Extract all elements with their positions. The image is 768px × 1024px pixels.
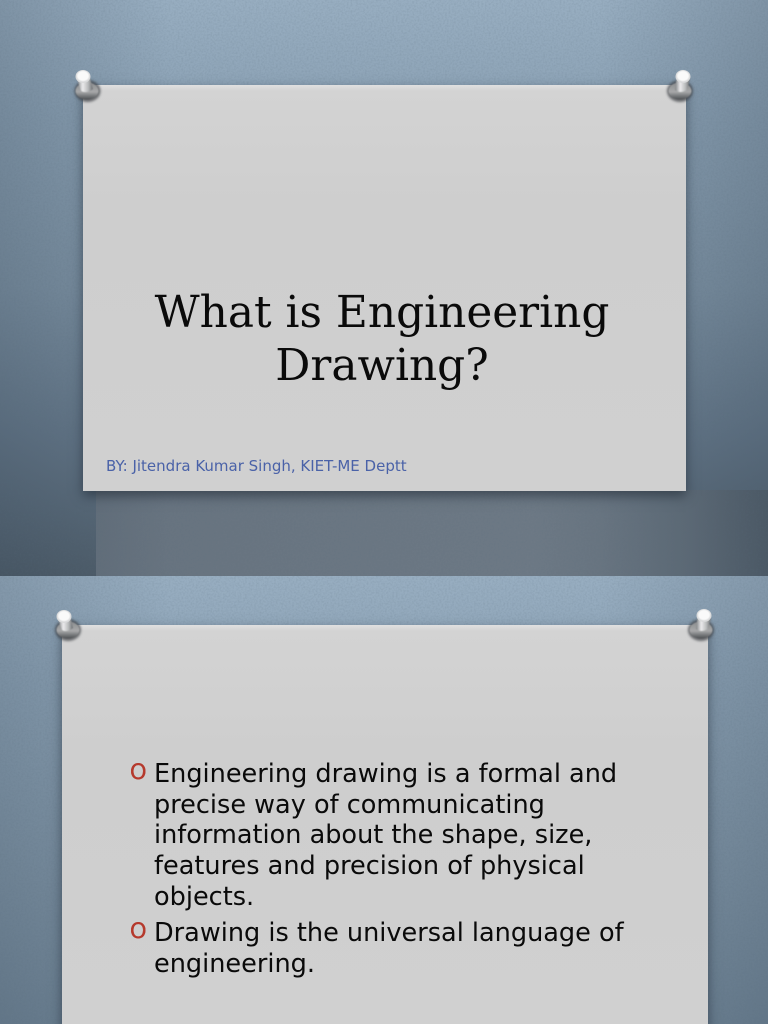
bullet text 2	[154, 918, 624, 979]
icon: pin right	[686, 609, 716, 642]
bullet marker 1: O	[130, 760, 147, 784]
bullet text 1: Engineering drawing is a formal and	[154, 759, 617, 789]
card: definition slide	[62, 625, 708, 1024]
bullet list	[130, 759, 624, 979]
title: Drawing?	[275, 340, 489, 391]
lower shadow band	[96, 490, 768, 576]
panel: definition slide	[0, 576, 768, 1024]
title	[154, 287, 609, 391]
bullet text 1: information about the shape, size,	[154, 820, 592, 850]
card: title slide	[83, 85, 686, 491]
icon: pin top left	[73, 70, 102, 104]
icon: pin left	[54, 610, 82, 642]
canvas texture	[74, 0, 715, 85]
bullet text 2: Drawing is the universal language of	[154, 918, 624, 948]
icon: pin top right	[666, 70, 694, 104]
bullet text 2: engineering.	[154, 949, 315, 979]
canvas texture	[54, 576, 723, 624]
edge vignette	[0, 0, 768, 576]
bullet marker 2: O	[130, 919, 147, 943]
edge vignette	[0, 576, 768, 1024]
byline: BY: Jitendra Kumar Singh, KIET-ME Deptt	[106, 456, 407, 474]
bullet text 1: precise way of communicating	[154, 790, 545, 820]
panel: title slide	[0, 0, 768, 576]
bullet text 1: features and precision of physical	[154, 851, 585, 881]
bullet text 1	[154, 759, 617, 912]
title: What is Engineering	[155, 287, 609, 338]
bullet text 1: objects.	[154, 882, 254, 912]
